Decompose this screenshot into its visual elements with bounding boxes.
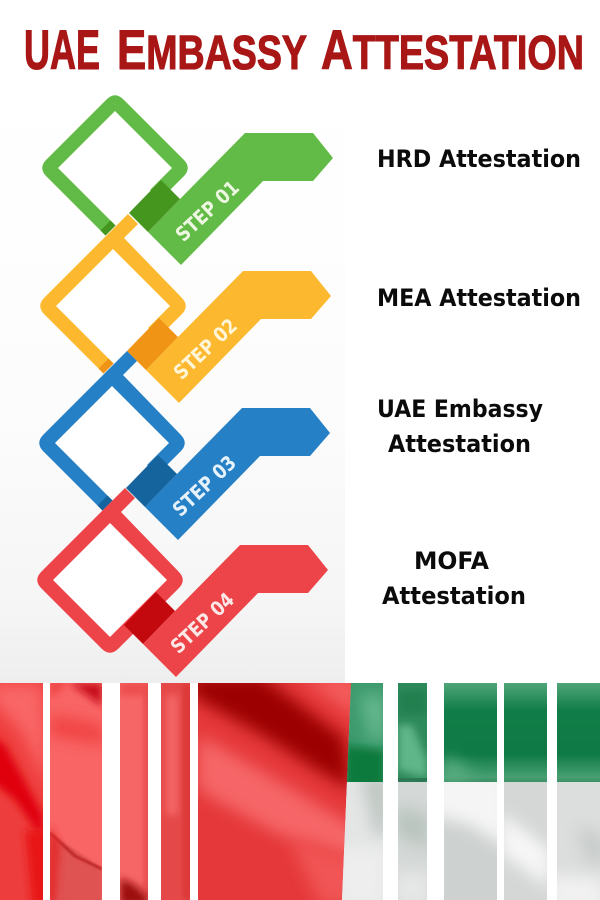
white strip 2 — [398, 782, 427, 900]
title — [24, 18, 584, 81]
red strip 1 — [0, 683, 43, 900]
step 1: green — [42, 95, 333, 265]
ring with connector — [39, 351, 185, 510]
green strip 3 — [444, 683, 497, 785]
label: MOFA Attestation: MOFA — [414, 547, 489, 575]
green strip 2 — [398, 683, 427, 782]
ring interior — [58, 111, 172, 225]
ring with connector — [40, 214, 186, 374]
step 3: blue — [39, 351, 330, 540]
ring with connector — [37, 488, 183, 653]
green strip 4 — [504, 683, 547, 782]
label: MOFA Attestation — [382, 547, 526, 610]
ribbon — [143, 545, 328, 677]
ring end shade — [100, 220, 116, 236]
ribbon — [145, 408, 330, 540]
ring end shade — [98, 496, 112, 510]
ribbon fold — [129, 180, 180, 232]
ring — [42, 95, 188, 236]
label: MEA Attestation: MEA Attestation — [377, 284, 581, 312]
green strip 1 — [347, 683, 383, 782]
left panel background — [0, 85, 345, 683]
label: UAE Embassy Attestation: UAE Embassy — [377, 395, 543, 423]
step label: STEP 03 — [168, 451, 241, 521]
red strip 3 — [120, 683, 148, 900]
label: HRD Attestation: HRD Attestation — [377, 145, 581, 173]
step 4: red — [37, 488, 328, 677]
red strip 4 — [161, 683, 192, 900]
white strip 3 — [444, 782, 497, 900]
red strip 5 — [198, 683, 351, 900]
step label: STEP 04 — [166, 588, 239, 658]
white strip 4 — [504, 782, 547, 900]
step label: STEP 01 — [171, 176, 244, 246]
title: EMBASSY — [117, 18, 307, 81]
white strip 5 — [557, 782, 600, 900]
ring interior — [53, 523, 167, 637]
step 2: yellow — [40, 214, 331, 403]
ring interior — [55, 386, 169, 500]
red strip 2 — [50, 683, 102, 900]
green strip 5 — [557, 683, 600, 782]
ring end shade — [98, 358, 114, 374]
step label: STEP 02 — [169, 314, 242, 384]
label: UAE Embassy Attestation: Attestation — [388, 430, 531, 458]
ribbon fold — [127, 318, 178, 370]
label: MOFA Attestation: Attestation — [382, 582, 526, 610]
title: UAE — [24, 18, 100, 81]
ribbon — [148, 133, 333, 265]
ribbon fold — [126, 455, 177, 507]
label: UAE Embassy Attestation — [377, 395, 543, 458]
ribbon fold — [124, 592, 175, 644]
ring interior — [56, 249, 170, 363]
white strip 1 — [342, 782, 383, 900]
ribbon — [146, 271, 331, 403]
flag banner — [0, 676, 600, 900]
